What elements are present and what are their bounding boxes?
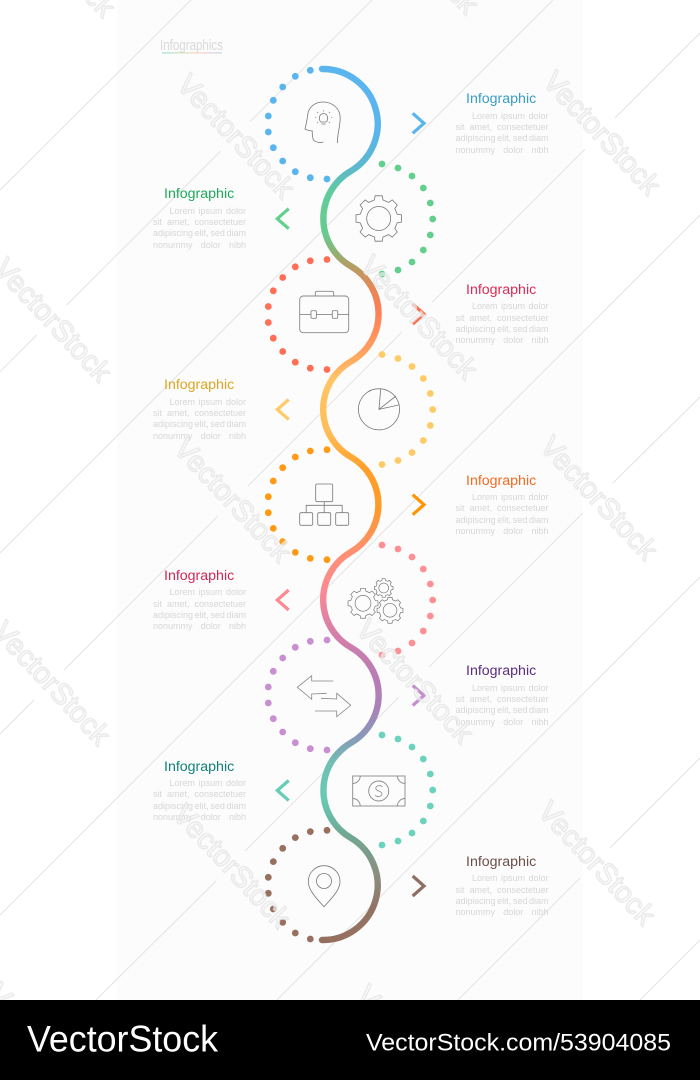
dotted ring 2 green — [379, 161, 436, 277]
watermarks: VectorStock — [170, 69, 301, 205]
icon: three gears — [348, 579, 403, 623]
text block 8: nonummy — [153, 812, 193, 822]
text block 2: sed — [210, 228, 225, 238]
title: Infographics — [160, 38, 223, 54]
text block 5: consectetuer — [497, 503, 548, 513]
text block 7: Infographic — [466, 663, 536, 679]
dotted ring 1 blue — [265, 67, 330, 182]
text block 7: sed — [513, 705, 527, 715]
text block 3: consectetuer — [497, 313, 548, 323]
wavy gradient ribbon — [322, 69, 379, 940]
text block 3: dolor — [528, 301, 548, 311]
watermarks: VectorStock — [533, 431, 664, 567]
text block 8: ipsum — [198, 778, 222, 788]
text block 9: dolor — [528, 873, 548, 883]
text block 2: diam — [226, 228, 246, 238]
dotted ring 8 teal — [379, 732, 436, 848]
text block 2: ipsum — [198, 206, 222, 216]
text block 4: dolor — [226, 397, 246, 407]
text block 2: Lorem — [170, 206, 195, 216]
text block 7: adipiscing — [456, 705, 496, 715]
dotted ring 7 purple — [265, 637, 330, 753]
dotted ring 4 yellow — [379, 351, 436, 468]
text block 4: Lorem — [170, 397, 195, 407]
icon: banknote — [353, 776, 405, 806]
icon: pie chart — [358, 389, 400, 430]
footer bar: VectorStock — [27, 1018, 218, 1060]
arrow: chevron 4 — [277, 400, 289, 420]
text block 5: dolor — [528, 492, 548, 502]
text block 8: sed — [210, 801, 225, 811]
text block 6: sed — [210, 610, 225, 620]
text block 3 — [456, 282, 548, 345]
text block 1: sed — [513, 133, 527, 143]
text block 6: Infographic — [164, 568, 234, 584]
text block 9: sit — [456, 885, 464, 895]
text block 2 — [153, 186, 246, 250]
text block 7: elit, — [497, 705, 511, 715]
text block 9: adipiscing — [456, 896, 496, 906]
text block 9: nonummy — [456, 907, 495, 917]
text block 7: amet, — [469, 694, 492, 704]
icon: gear — [356, 196, 401, 241]
text block 4: sed — [210, 419, 225, 429]
text block 4: ipsum — [198, 397, 222, 407]
text block 9: ipsum — [501, 873, 525, 883]
text block 6: elit, — [195, 610, 209, 620]
text block 5: diam — [529, 515, 548, 525]
icon: head with lightbulb — [305, 102, 340, 143]
arrow: chevron 3 — [413, 304, 424, 324]
arrow: chevron 5 — [413, 495, 424, 515]
text block 8: diam — [226, 801, 246, 811]
text block 4: amet, — [167, 408, 189, 418]
text block 9: elit, — [497, 896, 511, 906]
text block 3: nonummy — [456, 335, 495, 345]
text block 4: diam — [226, 419, 246, 429]
text block 3: Infographic — [466, 282, 536, 298]
text block 6: consectetuer — [194, 599, 246, 609]
icon: briefcase — [300, 291, 349, 333]
text block 8 — [153, 758, 246, 822]
text block 6: nibh — [229, 621, 246, 631]
text block 7: ipsum — [501, 683, 525, 693]
arrow: chevron 8 — [277, 780, 289, 800]
text block 5: Infographic — [466, 472, 536, 488]
text block 3: ipsum — [501, 301, 525, 311]
dotted ring 6 pink — [379, 542, 436, 658]
text block 9: dolor — [503, 907, 523, 917]
text block 4: dolor — [201, 431, 221, 441]
text block 1: amet, — [469, 122, 492, 132]
text block 2: consectetuer — [194, 217, 246, 227]
text block 7: sit — [456, 694, 464, 704]
text block 8: elit, — [195, 801, 209, 811]
text block 1: diam — [529, 133, 548, 143]
text block 3: Lorem — [472, 301, 498, 311]
watermarks: VectorStock — [531, 796, 662, 932]
text block 8: dolor — [201, 812, 221, 822]
text block 3: nibh — [531, 335, 548, 345]
text block 4: elit, — [195, 419, 209, 429]
text block 7: dolor — [528, 683, 548, 693]
text block 6: amet, — [167, 599, 189, 609]
dotted ring 5 orange — [265, 446, 330, 563]
text block 1: dolor — [503, 145, 523, 155]
text block 4: Infographic — [164, 377, 234, 393]
text block 6: dolor — [226, 587, 246, 597]
text block 9 — [456, 854, 548, 917]
arrow: chevron 6 — [277, 590, 289, 610]
text block 1: Lorem — [472, 111, 498, 121]
arrow: chevron 1 — [413, 113, 424, 133]
text block 9: Lorem — [472, 873, 498, 883]
text block 1: Infographic — [466, 91, 536, 107]
text block 2: nonummy — [153, 240, 193, 250]
text block 4: sit — [153, 408, 162, 418]
text block 7: nonummy — [456, 717, 495, 727]
text block 7: diam — [529, 705, 548, 715]
text block 6: dolor — [201, 621, 221, 631]
text block 3: amet, — [469, 313, 492, 323]
text block 1: sit — [456, 122, 464, 132]
text block 5: dolor — [503, 526, 523, 536]
text block 7: Lorem — [472, 683, 498, 693]
text block 6: diam — [226, 610, 246, 620]
text block 6 — [153, 568, 246, 631]
text block 2: Infographic — [164, 186, 234, 202]
footer bar: VectorStock.com/53904085 — [366, 1030, 671, 1056]
text block 9: amet, — [469, 885, 492, 895]
text block 9: Infographic — [466, 854, 536, 870]
text block 3: dolor — [503, 335, 523, 345]
text block 5: nibh — [531, 526, 548, 536]
text block 8: consectetuer — [194, 789, 246, 799]
text block 5: nonummy — [456, 526, 495, 536]
watermarks: VectorStock — [167, 433, 298, 569]
text block 6: adipiscing — [153, 610, 193, 620]
text block 2: dolor — [201, 240, 221, 250]
text block 2: adipiscing — [153, 228, 193, 238]
text block 5 — [456, 472, 548, 536]
icon: exchange arrows — [297, 676, 351, 717]
text block 1: adipiscing — [456, 133, 496, 143]
text block 7: nibh — [531, 717, 548, 727]
text block 6: ipsum — [198, 587, 222, 597]
text block 5: Lorem — [472, 492, 498, 502]
dotted ring 3 red — [265, 256, 330, 373]
icon: organization chart — [300, 484, 349, 525]
text block 7: consectetuer — [497, 694, 548, 704]
text block 9: consectetuer — [497, 885, 548, 895]
text block 5: amet, — [469, 503, 492, 513]
arrow: chevron 2 — [277, 209, 289, 229]
text block 1 — [456, 91, 548, 155]
text block 6: nonummy — [153, 621, 193, 631]
text block 5: sed — [513, 515, 527, 525]
text block 4: nonummy — [153, 431, 193, 441]
text block 4: adipiscing — [153, 419, 193, 429]
arrow: chevron 9 — [413, 876, 424, 896]
text block 4: nibh — [229, 431, 246, 441]
icon: map pin — [308, 866, 340, 907]
watermarks: VectorStock — [536, 66, 667, 202]
text block 5: adipiscing — [456, 515, 496, 525]
text block 8: Lorem — [170, 778, 195, 788]
text block 3: sit — [456, 313, 464, 323]
watermarks: VectorStock — [349, 614, 480, 750]
text block 8: adipiscing — [153, 801, 193, 811]
text block 7: dolor — [503, 717, 523, 727]
text block 9: sed — [513, 896, 527, 906]
text block 1: consectetuer — [497, 122, 548, 132]
text block 2: sit — [153, 217, 162, 227]
text block 5: elit, — [497, 515, 511, 525]
text block 8: Infographic — [164, 758, 234, 774]
text block 1: ipsum — [501, 111, 525, 121]
dotted ring 9 brown — [265, 827, 330, 942]
text block 1: nonummy — [456, 145, 495, 155]
text block 8: sit — [153, 789, 162, 799]
text block 4: consectetuer — [194, 408, 246, 418]
text block 6: sit — [153, 599, 162, 609]
text block 2: dolor — [226, 206, 246, 216]
text block 3: sed — [513, 324, 527, 334]
text block 2: elit, — [195, 228, 209, 238]
text block 7 — [456, 663, 548, 727]
text block 8: amet, — [167, 789, 189, 799]
text block 2: nibh — [229, 240, 246, 250]
text block 5: ipsum — [501, 492, 525, 502]
text block 2: amet, — [167, 217, 189, 227]
text block 1: elit, — [497, 133, 511, 143]
arrow: chevron 7 — [413, 686, 424, 706]
text block 1: nibh — [531, 145, 548, 155]
text block 3: elit, — [497, 324, 511, 334]
text block 9: diam — [529, 896, 548, 906]
text block 5: sit — [456, 503, 464, 513]
text block 8: nibh — [229, 812, 246, 822]
text block 6: Lorem — [170, 587, 195, 597]
text block 8: dolor — [226, 778, 246, 788]
text block 3: diam — [529, 324, 548, 334]
text block 3: adipiscing — [456, 324, 496, 334]
watermarks: VectorStock — [166, 799, 297, 935]
text block 1: dolor — [528, 111, 548, 121]
watermarks: VectorStock — [353, 250, 484, 386]
text block 9: nibh — [531, 907, 548, 917]
text block 4 — [153, 377, 246, 441]
